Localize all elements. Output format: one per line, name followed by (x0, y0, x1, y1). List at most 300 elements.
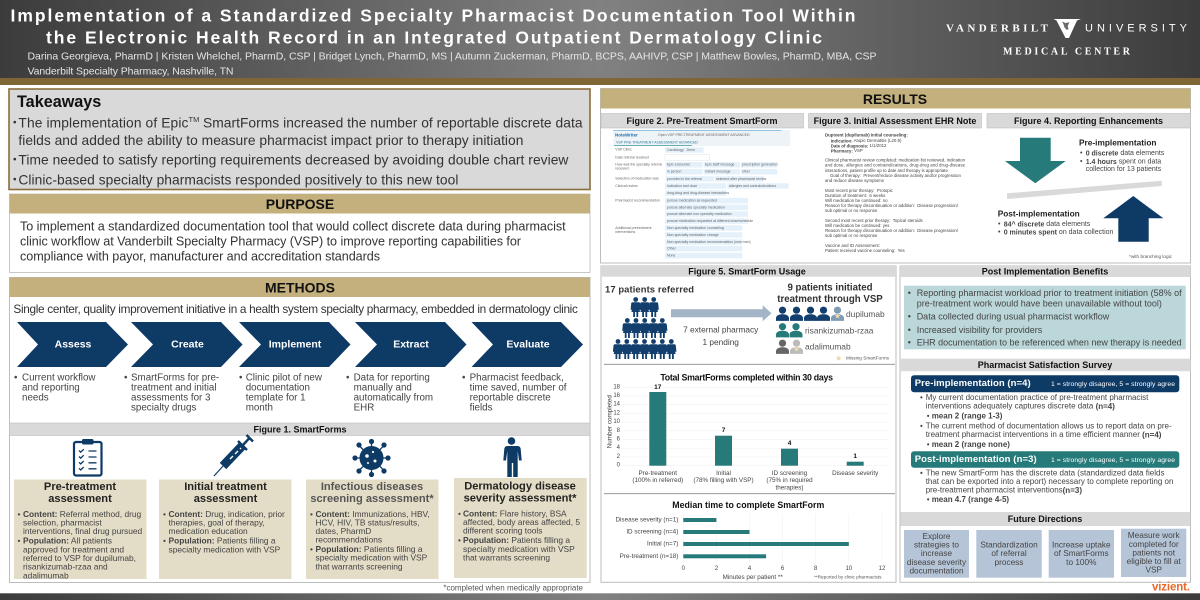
bar chart: median time to complete: Minutes per patient ** (723, 574, 783, 581)
card: pre-treatment assessment: Population: All patients (23, 536, 112, 546)
step details: implement (239, 372, 323, 414)
step details: evaluate: reportable discrete (470, 392, 551, 404)
future directions: Future Directions (1008, 514, 1082, 524)
card: dermatology disease severity assessment: • (458, 535, 461, 545)
card: dermatology disease severity assessment: Dermatology disease (464, 480, 576, 492)
figure 2: pre-treatment smartform: Epic staff message (705, 163, 735, 167)
figure 2: pre-treatment smartform: Date referral received (615, 155, 649, 159)
figure 2: pre-treatment smartform: interventions (615, 230, 635, 234)
title: the Electronic Health Record in an Integrated Outpatient Dermatology Clinic (46, 28, 822, 48)
card: pre-treatment assessment: • (18, 536, 20, 546)
pre-implementation text: • (1080, 158, 1083, 166)
icon: clipboard (74, 439, 102, 476)
header banner (0, 0, 1200, 85)
heading: takeaways: Takeaways (17, 93, 101, 111)
bar chart: total smartforms completed: Pre-treatment (639, 470, 677, 477)
step details: evaluate: Pharmacist feedback, (470, 372, 564, 384)
box: standardization of referral process: of referral (991, 549, 1027, 558)
post implementation benefits: • (908, 325, 911, 335)
figure 3: initial assessment EHR note: Date of diagnosis: 1/1/2012 (831, 143, 887, 148)
figure 3: initial assessment EHR note: Reason for therapy discontinuation or addition: Disease progression/ (825, 203, 959, 208)
figure 2: pre-treatment smartform: other (742, 170, 751, 174)
card: pre-treatment assessment: Pre-treatment (44, 481, 116, 493)
card: infectious diseases screening assessment: Population: Patients filling a (316, 544, 423, 554)
post-implementation responses: • (927, 495, 930, 504)
step details: evaluate: • (462, 372, 466, 384)
footnote: completed when medically appropriate: *completed when medically appropriate (443, 584, 584, 592)
post implementation benefits: Post Implementation Benefits (982, 266, 1108, 276)
card: dermatology disease severity assessment: Content: Flare history, BSA (463, 508, 567, 518)
purpose text: clinic workflow at Vanderbilt Specialty Pharmacy (VSP) to improve reporting capabilities for (20, 234, 521, 248)
step details: create (124, 372, 219, 414)
figure 3: initial assessment EHR note: Figure 3. Initial Assessment EHR Note (814, 116, 976, 126)
bar chart: total smartforms completed (606, 373, 888, 492)
bar chart: total smartforms completed: 4 (617, 445, 621, 451)
card: infectious diseases screening assessment: recommendations (316, 534, 382, 544)
card: pre-treatment assessment: adalimumab (23, 570, 69, 580)
box: measure work: eligible to fill at (1127, 557, 1181, 566)
box: increase uptake: Increase uptake (1052, 540, 1111, 550)
card: pre-treatment assessment: approved for treatment and (23, 544, 124, 554)
figure 2: pre-treatment smartform: Other (667, 247, 677, 251)
card: infectious diseases screening assessment: • (310, 509, 313, 519)
panel: results (600, 88, 1190, 263)
figure 2: pre-treatment smartform: drug-drug and drug-disease interactions (667, 191, 729, 195)
pre-implementation responses: treatment pharmacist interventions in a time efficient manner (n=4) (926, 430, 1162, 439)
post-implementation responses: pre-treatment pharmacist interventions(n=3) (926, 486, 1082, 494)
card: infectious diseases screening assessment (306, 480, 438, 579)
takeaway bullets: TM (188, 115, 199, 124)
arrow: teal down arrow (1005, 138, 1066, 183)
box: disease severity documentation: Explore (923, 532, 951, 541)
bar chart: total smartforms completed: 2 (617, 454, 621, 460)
bar chart: total smartforms completed: 6 (617, 436, 621, 442)
bar chart: median time to complete (615, 500, 886, 581)
post-implementation responses: • (920, 468, 923, 478)
figure 2: pre-treatment smartform: pursue medication requested at different dose/schedule (667, 219, 753, 223)
step details: create: assessments for 3 (131, 392, 211, 404)
card: infectious diseases screening assessment: dates, PharmD (316, 526, 371, 536)
process chevrons: Assess (55, 338, 92, 350)
process chevrons: Implement (269, 338, 322, 350)
post-implementation text: 84^ discrete data elements (1004, 220, 1091, 228)
bar chart: median time to complete: Pre-treatment (n=18) (620, 553, 678, 560)
step details: assess: needs (22, 392, 49, 404)
pharmacist satisfaction survey (900, 359, 1190, 504)
panel: purpose (10, 194, 590, 272)
card: infectious diseases screening assessment: Content: Immunizations, HBV, (316, 509, 430, 519)
pre-implementation text: 0 discrete data elements (1086, 150, 1165, 157)
panel: takeaways (9, 89, 590, 190)
logo: Vanderbilt University Medical Center: UNIVERSITY (1085, 22, 1188, 34)
card: pre-treatment assessment: assessment (48, 493, 112, 505)
pre-implementation responses: mean 2 (range none) (932, 440, 1010, 449)
attrition text (683, 325, 759, 347)
bar chart: total smartforms completed: 0 (617, 463, 621, 469)
card: pre-treatment assessment: Content: Referral method, drug (23, 509, 142, 519)
pre-implementation responses: • (927, 412, 930, 420)
card: dermatology disease severity assessment: severity assessment* (464, 492, 577, 504)
figure 2: pre-treatment smartform: None (667, 254, 675, 258)
takeaway bullets: • (13, 118, 17, 128)
post-implementation responses (920, 468, 1173, 504)
post-implementation text: • (998, 229, 1001, 236)
card: dermatology disease severity assessment: Population: Patients filling a (463, 535, 570, 545)
card: initial treatment assessment: specialty medication with VSP (168, 544, 281, 554)
logo: Vanderbilt University Medical Center: MEDICAL CENTER (1003, 46, 1131, 58)
figure 3: initial assessment EHR note: Duration of treatment: 6 weeks (825, 193, 886, 198)
card: pre-treatment assessment (14, 480, 146, 580)
initiated patients: 9 patients initiated (787, 282, 873, 294)
step details: implement: documentation (246, 382, 310, 394)
figure 2: pre-treatment smartform: pursue alternate specialty medication (667, 205, 725, 209)
pre-implementation responses: • (927, 440, 930, 449)
logo: Vanderbilt University Medical Center (946, 19, 1188, 58)
purpose text: To implement a standardized documentation tool that would collect discrete data during pharmacist (20, 220, 566, 234)
box: measure work: VSP (1145, 566, 1162, 574)
initiated patients: Missing SmartForms (846, 356, 890, 360)
figure 2: pre-treatment smartform: Non-specialty medication change (667, 233, 719, 237)
figure 3: initial assessment EHR note: sub optimal or no response (825, 233, 878, 238)
card: infectious diseases screening assessment: HCV, HIV, TB status/results, (316, 518, 419, 528)
step details: implement: Clinic pilot of new (246, 372, 323, 384)
bar chart: median time to complete: 10 (845, 566, 853, 572)
figure 4: reporting enhancements (987, 114, 1190, 259)
authors and affiliation: Vanderbilt Specialty Pharmacy, Nashville, TN (28, 66, 234, 78)
figure 2: pre-treatment smartform: VSP PRE-TREATMENT ASSESSMENT ADVANCED (616, 140, 698, 144)
bar chart: total smartforms completed: 4 (788, 440, 792, 447)
bar chart: total smartforms completed: (75% in required (766, 477, 813, 484)
figure 2: pre-treatment smartform: Additional pretreatment (615, 226, 652, 230)
post implementation benefits: • (908, 288, 911, 298)
heading: figure 5: Figure 5. SmartForm Usage (688, 266, 806, 276)
figure 2: pre-treatment smartform (601, 114, 804, 258)
figure 2: pre-treatment smartform: Cardiology Derm (667, 148, 695, 152)
bar chart: total smartforms completed: 7 (722, 427, 726, 434)
heading: results: RESULTS (863, 91, 927, 107)
initiated patients: treatment through VSP (777, 294, 883, 305)
takeaway bullets (13, 115, 583, 188)
bar chart: total smartforms completed: 12 (613, 410, 621, 416)
post-implementation header: 1 = strongly disagree, 5 = strongly agree (1051, 457, 1175, 464)
card: pre-treatment assessment: risankizumab-rzaa and (23, 562, 108, 572)
step details: create: SmartForms for pre- (131, 372, 219, 384)
bar chart: median time to complete: 4 (748, 566, 752, 572)
pre-implementation text: 1.4 hours spent on data (1086, 158, 1161, 166)
takeaway bullets: Clinic-based specialty pharmacists responded positively to this new tool (18, 172, 458, 188)
step details: extract: EHR (354, 402, 374, 414)
bar chart: total smartforms completed: Initial (716, 470, 731, 477)
pre-implementation text: Pre-implementation (1079, 137, 1156, 147)
pre-implementation responses: • (920, 422, 923, 430)
bar chart: median time to complete: **Reported by clinic pharmacists (814, 574, 882, 580)
figure 3: initial assessment EHR note: Most recent prior therapy: Protopic (825, 188, 894, 193)
pre-implementation text: collection for 13 patients (1086, 166, 1162, 173)
figure 2: pre-treatment smartform: VSP Clinic (615, 148, 632, 152)
title: Implementation of a Standardized Specialty Pharmacist Documentation Tool Within (10, 6, 856, 26)
box: increase uptake: to 100% (1066, 558, 1097, 567)
post-implementation responses: that can be exported into a report) necessary to complete reporting on (926, 477, 1173, 486)
bar chart: total smartforms completed: (100% in referred) (632, 477, 683, 484)
future directions (900, 513, 1190, 578)
pre-implementation responses: My current documentation practice of pre-treatment pharmacist (926, 393, 1149, 402)
figure 2: pre-treatment smartform: received (615, 167, 629, 171)
box: increase uptake: of SmartForms (1054, 549, 1109, 558)
card: dermatology disease severity assessment (454, 478, 587, 578)
bar chart: median time to complete: 0 (682, 566, 686, 572)
bar chart: median time to complete: 2 (715, 566, 719, 572)
step details: extract: manually and (354, 382, 412, 394)
card: pre-treatment assessment: selection, pharmacist (23, 518, 102, 528)
figure 4: reporting enhancements: Figure 4. Reporting Enhancements (1014, 116, 1163, 126)
icon: person (503, 437, 522, 477)
bar chart: total smartforms completed: Number completed (606, 395, 614, 448)
step details: evaluate: fields (470, 402, 493, 414)
figure 2: pre-treatment smartform: Pharmacist recommendation (615, 198, 660, 202)
pre-implementation responses: mean 2 (range 1-3) (932, 412, 1003, 420)
card: initial treatment assessment: Initial treatment (184, 481, 267, 493)
figure 1 caption bar (10, 423, 590, 436)
card: pre-treatment assessment: interventions, final drug pursued (23, 526, 143, 536)
box: measure work: completed for (1129, 540, 1179, 549)
figure 2: pre-treatment smartform: Selection of medication was (615, 177, 659, 181)
pre-implementation header: Pre-implementation (n=4) (915, 378, 1031, 389)
bar chart: median time to complete: Disease severity (n=1) (615, 516, 678, 524)
initiated patients: dupilumab (846, 309, 885, 319)
post implementation benefits: pre-treatment work would have been unavailable without tool) (917, 298, 1162, 308)
pharmacist satisfaction survey: Pharmacist Satisfaction Survey (978, 360, 1112, 370)
figure 2: pre-treatment smartform: in person (667, 170, 681, 174)
step details: assess: • (14, 372, 18, 384)
figure 2: pre-treatment smartform: NoteWriter (615, 132, 638, 138)
card: infectious diseases screening assessment: • (310, 544, 313, 554)
bar chart: total smartforms completed: 18 (613, 384, 621, 390)
bar chart: median time to complete: 8 (814, 566, 818, 572)
process chevrons: Evaluate (506, 338, 550, 350)
pre-implementation header: 1 = strongly disagree, 5 = strongly agree (1051, 381, 1175, 388)
card: infectious diseases screening assessment: specialty medication with VSP (316, 553, 428, 563)
bar chart: total smartforms completed: 16 (613, 393, 621, 399)
figure 3: initial assessment EHR note: Clinical pharmacist review completed: medication list reviewed, indication (825, 158, 966, 162)
card: infectious diseases screening assessment: that warrants screening (316, 562, 403, 572)
card: initial treatment assessment: • (163, 536, 166, 546)
figure 2: pre-treatment smartform: pursue medication as requested (667, 199, 717, 203)
post-implementation header: Post-implementation (n=3) (915, 454, 1037, 465)
initiated patients (776, 282, 890, 361)
arrow: navy up arrow (1103, 196, 1163, 242)
figure 3: initial assessment EHR note: Will medication be continued: no (825, 198, 888, 203)
card: initial treatment assessment (159, 480, 292, 579)
post-implementation responses: mean 4.7 (range 4-5) (932, 495, 1009, 504)
figure 2: pre-treatment smartform: allergies and contraindications (729, 184, 776, 188)
figure 2: pre-treatment smartform: Non-specialty medication recommendation (new med) (667, 240, 751, 244)
figure 2: pre-treatment smartform: prescription generation (742, 163, 778, 167)
box: increase uptake (1049, 530, 1114, 578)
figure 3: initial assessment EHR note: Indication: Atopic Dermatitis (L20.9) (831, 138, 902, 143)
box: disease severity documentation (904, 530, 969, 578)
heading: methods: METHODS (265, 280, 335, 296)
bar chart: total smartforms completed: 17 (654, 384, 662, 391)
figure 3: initial assessment EHR note: Goal of therapy: Prevent/reduce disease activity and/or progression (830, 173, 961, 178)
post-implementation responses: The new SmartForm has the discrete data (standardized data fields (926, 468, 1164, 478)
bar chart: total smartforms completed: therapies) (775, 484, 804, 492)
box: measure work (1121, 529, 1186, 577)
card: initial treatment assessment: Population: Patients filling a (168, 536, 276, 546)
icon: virus (352, 439, 391, 477)
step details: create: • (124, 372, 128, 384)
process chevrons: Extract (393, 338, 429, 350)
box: measure work: Measure work (1128, 531, 1180, 540)
icon: syringe (214, 435, 253, 476)
takeaway bullets: SmartForms increased the number of reportable discrete data (203, 116, 583, 130)
pre-implementation responses (920, 393, 1172, 449)
bar chart: median time to complete: 6 (781, 566, 785, 572)
step details: evaluate: time saved, number of (470, 382, 567, 394)
bar chart: total smartforms completed: Total SmartForms completed within 30 days (660, 373, 833, 383)
step details: extract: Data for reporting (354, 372, 430, 384)
logo: vizient: vizient. (1152, 582, 1190, 594)
logo: Vanderbilt University Medical Center: VANDERBILT (946, 22, 1049, 34)
post implementation benefits: Increased visibility for providers (917, 325, 1043, 335)
figure 3: initial assessment EHR note: Will medication be continued: yes (825, 223, 890, 228)
post implementation benefits: Reporting pharmacist workload prior to treatment initiation (58% of (917, 288, 1182, 298)
step details: implement: • (239, 372, 243, 384)
box: disease severity documentation: documentation (909, 566, 964, 576)
figure 2: pre-treatment smartform: Non-specialty medication counseling (667, 226, 724, 230)
figure 2: pre-treatment smartform: provided in the referral (667, 177, 702, 181)
divider wedge (1007, 181, 1162, 199)
bar chart: total smartforms completed: 10 (613, 419, 621, 425)
figure 3: initial assessment EHR note: and reduce disease symptoms (825, 178, 885, 183)
figure 1 caption bar: Figure 1. SmartForms (253, 424, 347, 434)
bar chart: total smartforms completed: (78% filling with VSP) (693, 477, 754, 484)
card: pre-treatment assessment: • (18, 509, 20, 519)
takeaway bullets: • (13, 174, 17, 186)
purpose text: compliance with payor, manufacturer and accreditation standards (20, 250, 380, 264)
figure 3: initial assessment EHR note: sub optimal or no response (825, 208, 878, 213)
card: dermatology disease severity assessment: specialty medication with VSP (463, 544, 575, 554)
post implementation benefits: • (908, 338, 911, 348)
box: disease severity documentation: increase (921, 549, 953, 558)
figure 2: pre-treatment smartform: indication and dose (667, 184, 697, 188)
card: initial treatment assessment: • (163, 509, 166, 519)
arrow: referred to initiated (671, 305, 772, 321)
post-implementation text: Post-implementation (998, 208, 1080, 218)
figure 2: pre-treatment smartform: Open VSP PRE-TREATMENT ASSESSMENT ADVANCED (658, 133, 750, 137)
referred patients (605, 284, 694, 359)
card: pre-treatment assessment: referred to VSP for dupilumab, (23, 553, 136, 563)
step details: assess: Current workflow (22, 372, 96, 384)
heading: purpose: PURPOSE (266, 196, 334, 212)
step details: assess (14, 372, 96, 404)
card: initial treatment assessment: therapies, goal of therapy, (168, 518, 265, 528)
box: disease severity documentation: strategies to (914, 540, 959, 550)
figure 2: pre-treatment smartform: Clinical review (615, 184, 638, 188)
post-implementation text: • (998, 221, 1001, 228)
figure 3: initial assessment EHR note: interactions, patient profile up to date and therapy is appropriate (825, 168, 948, 173)
bar chart: total smartforms completed: Disease severity (832, 470, 879, 477)
bar chart: total smartforms completed: 14 (613, 402, 621, 408)
post implementation benefits: EHR documentation to be referenced when new therapy is needed (917, 338, 1182, 348)
initiated patients: risankizumab-rzaa (805, 325, 874, 335)
figure 2: pre-treatment smartform: instant message (705, 170, 731, 174)
step details: implement: month (246, 402, 273, 414)
card: dermatology disease severity assessment: affected, body areas affected, 5 (463, 517, 580, 527)
post-implementation text: 0 minutes spent on data collection (1004, 229, 1114, 236)
step details: extract: • (346, 372, 350, 384)
figure 2: pre-treatment smartform: Figure 2. Pre-Treatment SmartForm (626, 116, 778, 126)
figure 3: initial assessment EHR note: and dose, allergies and contraindications, drug-drug and drug-disease (825, 162, 966, 168)
post-implementation text (998, 208, 1114, 236)
pre-implementation responses: • (920, 393, 923, 402)
process chevrons (17, 322, 583, 367)
pre-implementation header (911, 375, 1179, 392)
post implementation benefits: Data collected during usual pharmacist workflow (917, 312, 1110, 322)
panel: post implementation, survey and future directions (900, 266, 1190, 582)
card: dermatology disease severity assessment: that warrants screening (463, 552, 550, 562)
step details: extract: automatically from (354, 392, 433, 404)
card: infectious diseases screening assessment: screening assessment* (310, 493, 434, 505)
step details: implement: template for 1 (246, 392, 306, 404)
title (10, 6, 856, 48)
card: dermatology disease severity assessment: different scoring tools (463, 526, 542, 536)
card: dermatology disease severity assessment: • (458, 508, 461, 518)
takeaway bullets: The implementation of Epic (18, 116, 188, 130)
pre-implementation text: • (1080, 150, 1083, 157)
card: initial treatment assessment: assessment (194, 493, 258, 505)
figure 3: initial assessment EHR note: Reason for therapy discontinuation or addition: Disease progression/ (825, 228, 959, 233)
purpose text (20, 220, 566, 264)
footnote: branching logic: *with branching logic (1129, 254, 1173, 259)
step details: evaluate (462, 372, 567, 414)
box: standardization of referral process (976, 530, 1042, 578)
bar chart: total smartforms completed: ID screening (772, 470, 808, 477)
bar chart: median time to complete: ID screening (n=4) (626, 528, 678, 536)
figure 2: pre-treatment smartform: How was the specialty referral (615, 163, 662, 167)
footer band (0, 593, 1200, 600)
step details: extract (346, 372, 433, 414)
post implementation benefits: • (908, 312, 911, 322)
initiated patients: adalimumab (805, 342, 851, 352)
card: initial treatment assessment: medication education (168, 526, 248, 536)
card: infectious diseases screening assessment: Infectious diseases (321, 481, 423, 493)
post-implementation header (911, 451, 1179, 468)
box: standardization of referral process: Standardization (980, 540, 1038, 550)
card: initial treatment assessment: Content: Drug, indication, prior (168, 509, 285, 519)
pre-implementation responses: interventions adequately captures discrete data (n=4) (926, 402, 1115, 410)
bar chart: median time to complete: Median time to complete SmartForm (672, 500, 824, 510)
process chevrons: Create (171, 338, 204, 350)
takeaway bullets: Time needed to satisfy reporting requirements decreased by avoiding double chart review (18, 152, 568, 168)
figure 3: initial assessment EHR note: Second most recent prior therapy: Topical steroids (825, 218, 924, 223)
figure 3: initial assessment EHR note: Dupixent (dupilumab) initial counseling: (825, 132, 908, 138)
step details: create: specialty drugs (131, 402, 196, 414)
pre-implementation responses: The current method of documentation allows us to report data on pre- (926, 422, 1172, 430)
step details: create: treatment and initial (131, 382, 216, 394)
referred patients: 17 patients referred (605, 284, 694, 294)
figure 3: initial assessment EHR note: Patient received vaccine counseling: Yes (825, 248, 906, 253)
attrition text: 7 external pharmacy (683, 325, 759, 335)
authors and affiliation (28, 50, 876, 78)
attrition text: 1 pending (702, 337, 739, 347)
box: standardization of referral process: process (995, 558, 1023, 567)
box: disease severity documentation: disease severity (907, 558, 967, 567)
figure 3: initial assessment EHR note (808, 114, 982, 253)
box: measure work: patients not (1132, 548, 1176, 558)
bar chart: total smartforms completed: 1 (853, 453, 857, 460)
figure 3: initial assessment EHR note: Vaccine and ID Assessment: (825, 243, 880, 248)
post implementation benefits (900, 266, 1190, 349)
